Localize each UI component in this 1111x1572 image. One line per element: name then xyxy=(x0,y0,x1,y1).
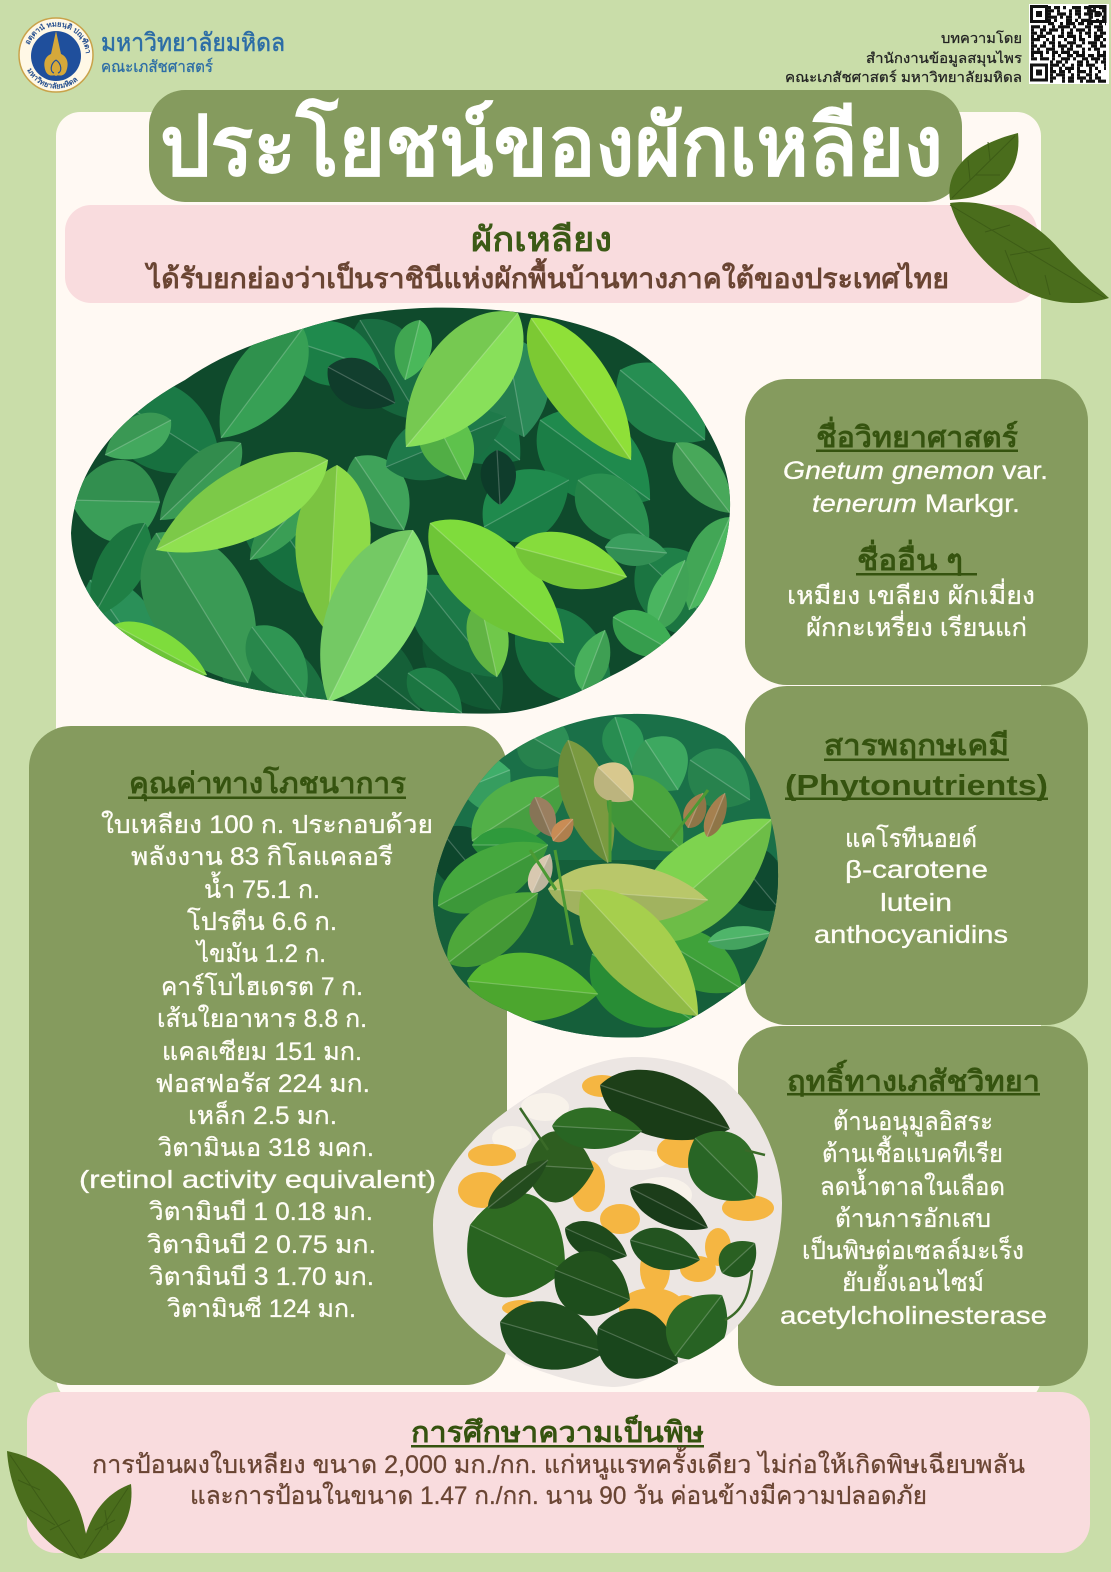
panel: nutritional values: ใบเหลียง 100 ก. ประกอบด้วย xyxy=(101,810,433,839)
panel: nutritional values: เส้นใยอาหาร 8.8 ก. xyxy=(157,1004,367,1033)
panel: pharmacological activities xyxy=(738,1026,1088,1386)
panel: nutritional values: แคลเซียม 151 มก. xyxy=(162,1038,362,1066)
heading: toxicity study: การศึกษาความเป็นพิษ xyxy=(411,1414,704,1449)
panel: nutritional values: (retinol activity equivalent) xyxy=(79,1166,436,1194)
panel: nutritional values: คาร์โบไฮเดรต 7 ก. xyxy=(161,972,363,1001)
panel: nutritional values: โปรตีน 6.6 ก. xyxy=(187,907,337,936)
panel: toxicity study: การป้อนผงใบเหลียง ขนาด 2,000 มก./กก. แก่หนูแรทครั้งเดียว ไม่ก่อให้เกิดพิษเฉียบพลัน xyxy=(92,1446,1025,1480)
panel: phytonutrients: lutein xyxy=(880,889,952,917)
panel: phytonutrients xyxy=(745,686,1088,1025)
panel: scientific name: Gnetum gnemon var. xyxy=(783,457,1048,485)
panel: pharmacological activities: acetylcholinesterase xyxy=(780,1302,1047,1330)
panel: nutritional values: วิตามินบี 1 0.18 มก. xyxy=(149,1198,373,1226)
panel: nutritional values: ไขมัน 1.2 ก. xyxy=(195,939,326,968)
panel: nutritional values: น้ำ 75.1 ก. xyxy=(204,871,320,904)
heading: phytonutrients: สารพฤกษเคมี xyxy=(824,730,1009,762)
panel: pharmacological activities: ลดน้ำตาลในเลือด xyxy=(820,1168,1005,1201)
logo: Mahidol University: อตฺตานํ ทมยนฺติ ปณฺฑิตา xyxy=(26,22,90,54)
QR code xyxy=(1029,4,1109,84)
panel: pharmacological activities: ยับยั้งเอนไซม์ xyxy=(842,1264,984,1297)
heading: pharmacological activities: ฤทธิ์ทางเภสัชวิทยา xyxy=(787,1059,1040,1098)
panel: nutritional values: ฟอสฟอรัส 224 มก. xyxy=(155,1070,370,1098)
panel: pharmacological activities: ต้านการอักเสบ xyxy=(835,1205,991,1233)
photo: stir-fried leaves with egg xyxy=(425,1050,790,1395)
panel: phytonutrients: β-carotene xyxy=(845,856,988,884)
logo: Mahidol University xyxy=(18,17,285,93)
icon: bottom leaves xyxy=(7,1451,132,1559)
icon: top leaves xyxy=(949,133,1109,303)
panel: phytonutrients: anthocyanidins xyxy=(814,921,1008,949)
article credit: สำนักงานข้อมูลสมุนไพร xyxy=(866,50,1023,67)
intro banner: ผักเหลียง xyxy=(471,221,612,259)
article credit: บทความโดย xyxy=(941,30,1022,46)
panel: scientific name: tenerum Markgr. xyxy=(812,490,1020,518)
panel: phytonutrients: แคโรทีนอยด์ xyxy=(845,824,977,853)
panel: toxicity study: และการป้อนในขนาด 1.47 ก./กก. นาน 90 วัน ค่อนข้างมีความปลอดภัย xyxy=(190,1481,927,1510)
panel: scientific name: เหมียง เขลียง ผักเมี่ยง xyxy=(787,578,1035,610)
panel: pharmacological activities: ต้านอนุมูลอิสระ xyxy=(833,1108,993,1137)
panel: toxicity study xyxy=(27,1392,1090,1553)
photo: young shoots xyxy=(432,714,778,1038)
photo: fresh leaves bush xyxy=(71,308,730,714)
panel: nutritional values: วิตามินเอ 318 มคก. xyxy=(158,1134,374,1162)
panel: nutritional values: วิตามินซี 124 มก. xyxy=(167,1295,356,1323)
logo: Mahidol University: มหาวิทยาลัยมหิดล xyxy=(27,68,78,89)
panel: scientific name xyxy=(745,379,1088,685)
title banner: ประโยชน์ของผักเหลียง xyxy=(160,98,943,193)
intro banner xyxy=(65,205,1037,303)
panel: nutritional values: พลังงาน 83 กิโลแคลอรี xyxy=(131,842,393,871)
heading: nutritional values: คุณค่าทางโภชนาการ xyxy=(129,765,406,801)
panel: nutritional values: วิตามินบี 2 0.75 มก. xyxy=(147,1231,376,1259)
intro banner: ได้รับยกย่องว่าเป็นราชินีแห่งผักพื้นบ้านทางภาคใต้ของประเทศไทย xyxy=(144,257,949,294)
heading: other names: ชื่ออื่น ๆ xyxy=(857,539,963,577)
panel: pharmacological activities: เป็นพิษต่อเซลล์มะเร็ง xyxy=(802,1235,1024,1265)
heading: other names xyxy=(856,539,977,577)
panel: scientific name: ผักกะเหรี่ยง เรียนแก่ xyxy=(806,610,1027,642)
logo: Mahidol University: มหาวิทยาลัยมหิดล xyxy=(101,29,285,57)
heading: scientific name: ชื่อวิทยาศาสตร์ xyxy=(816,416,1018,454)
panel: nutritional values: เหล็ก 2.5 มก. xyxy=(188,1100,337,1130)
panel: nutritional values xyxy=(29,726,507,1385)
panel: nutritional values: วิตามินบี 3 1.70 มก. xyxy=(149,1263,374,1291)
logo: Mahidol University: คณะเภสัชศาสตร์ xyxy=(101,57,213,76)
cream content panel xyxy=(56,112,1041,1402)
article credit: คณะเภสัชศาสตร์ มหาวิทยาลัยมหิดล xyxy=(785,69,1022,85)
heading: phytonutrients: (Phytonutrients) xyxy=(785,770,1048,802)
heading: phytonutrients xyxy=(785,730,1048,802)
article credit xyxy=(785,30,1023,85)
panel: pharmacological activities: ต้านเชื้อแบคทีเรีย xyxy=(822,1135,1003,1168)
